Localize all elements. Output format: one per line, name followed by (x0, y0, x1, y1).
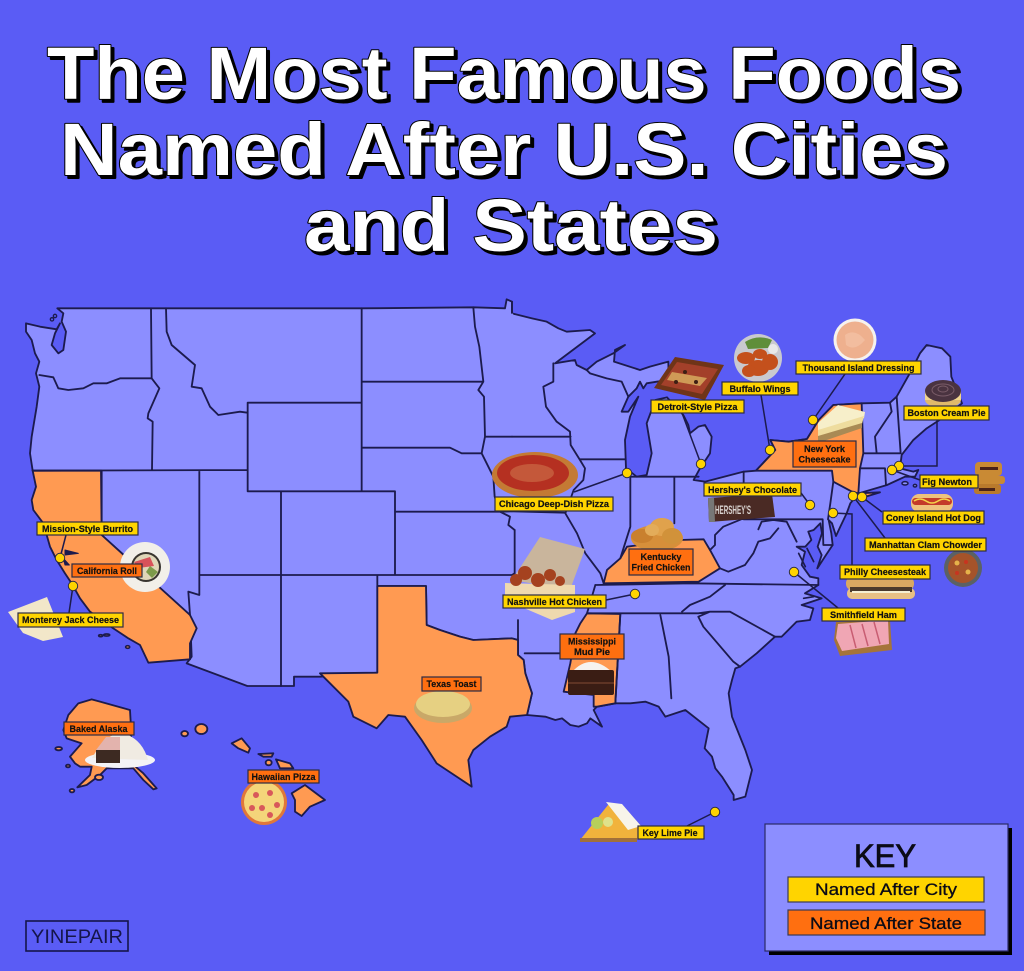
food: California Roll (120, 542, 170, 592)
food: Hershey's Chocolate: HERSHEY'S (715, 503, 751, 517)
food: Texas Toast (414, 691, 472, 723)
food: Thousand Island Dressing (834, 318, 876, 362)
map: contiguous United States (26, 299, 962, 800)
label: Fig Newton: Fig Newton (922, 477, 972, 488)
channel islands (99, 634, 130, 648)
label: Kentucky Fried Chicken: Fried Chicken (632, 563, 691, 574)
label: Mississippi Mud Pie: Mud Pie (574, 647, 610, 658)
food: Buffalo Wings (734, 334, 782, 382)
logo: VinePair (26, 921, 128, 951)
label: Monterey Jack Cheese: Monterey Jack Cheese (22, 615, 119, 626)
label: New York Cheesecake (793, 441, 856, 467)
label: New York Cheesecake: Cheesecake (798, 455, 850, 466)
label: Baked Alaska: Baked Alaska (70, 724, 128, 735)
label: Key Lime Pie: Key Lime Pie (642, 828, 698, 839)
title: Named After U.S. Cities (60, 108, 948, 191)
food: Kentucky Fried Chicken (631, 518, 683, 551)
food: Baked Alaska (85, 733, 155, 768)
label: Mississippi Mud Pie (560, 634, 624, 659)
label: Boston Cream Pie: Boston Cream Pie (908, 408, 986, 419)
label: Buffalo Wings: Buffalo Wings (730, 384, 790, 395)
leader lines (60, 374, 937, 826)
state border lines west (33, 307, 515, 686)
food: Boston Cream Pie (925, 380, 961, 408)
label: Kentucky Fried Chicken (629, 549, 693, 575)
food: Monterey Jack Cheese (8, 597, 63, 641)
food: Philly Cheesesteak (846, 577, 915, 599)
title: The Most Famous Foods (47, 32, 961, 115)
dots (55, 415, 904, 817)
label: Mississippi Mud Pie: Mississippi (568, 637, 616, 648)
map: Alaska (55, 699, 157, 792)
food: Mississippi Mud Pie (568, 662, 614, 695)
orange states east (756, 403, 863, 493)
map: Hawaii (181, 724, 325, 816)
label: New York Cheesecake: New York (804, 444, 846, 455)
label: Thousand Island Dressing: Thousand Island Dressing (802, 363, 915, 374)
state border lines east (512, 363, 901, 703)
key: named after city (788, 877, 984, 902)
label: Mission-Style Burrito: Mission-Style Burrito (42, 524, 133, 535)
food: Key Lime Pie (580, 802, 641, 842)
label: California Roll: California Roll (77, 566, 137, 577)
label: Hershey's Chocolate: Hershey's Chocolate (708, 485, 797, 496)
logo: VinePair: YINEPAIR (31, 927, 123, 948)
label: Kentucky Fried Chicken: Kentucky (640, 552, 682, 563)
label: Detroit-Style Pizza: Detroit-Style Pizza (658, 402, 738, 413)
key: named after state: Named After State (810, 914, 962, 933)
food: Hershey's Chocolate (708, 494, 775, 522)
food: Fig Newton (974, 462, 1005, 494)
label: Chicago Deep-Dish Pizza: Chicago Deep-Dish Pizza (499, 499, 610, 510)
label: Philly Cheesesteak: Philly Cheesesteak (844, 567, 927, 578)
label: Texas Toast: Texas Toast (426, 679, 477, 690)
food: Hawaiian Pizza (241, 779, 287, 825)
food: New York Cheesecake (818, 405, 865, 443)
label: Hawaiian Pizza: Hawaiian Pizza (252, 772, 316, 783)
label: Nashville Hot Chicken: Nashville Hot Chicken (507, 597, 602, 608)
label: Smithfield Ham: Smithfield Ham (830, 610, 897, 621)
food: Smithfield Ham (834, 620, 892, 656)
label: Manhattan Clam Chowder: Manhattan Clam Chowder (869, 540, 982, 551)
title (47, 32, 961, 267)
orange states west (32, 471, 197, 663)
key: named after city: Named After City (815, 880, 958, 899)
food: Manhattan Clam Chowder (944, 549, 982, 587)
food: Nashville Hot Chicken (505, 537, 585, 620)
key heading: KEY (854, 838, 916, 874)
title: and States (304, 184, 718, 267)
food: Detroit-Style Pizza (654, 357, 724, 400)
food: Coney Island Hot Dog (911, 494, 953, 512)
label: Coney Island Hot Dog: Coney Island Hot Dog (886, 513, 981, 524)
key: named after state (788, 910, 985, 935)
panel: key (765, 824, 1012, 955)
food: Chicago Deep-Dish Pizza (492, 452, 578, 498)
